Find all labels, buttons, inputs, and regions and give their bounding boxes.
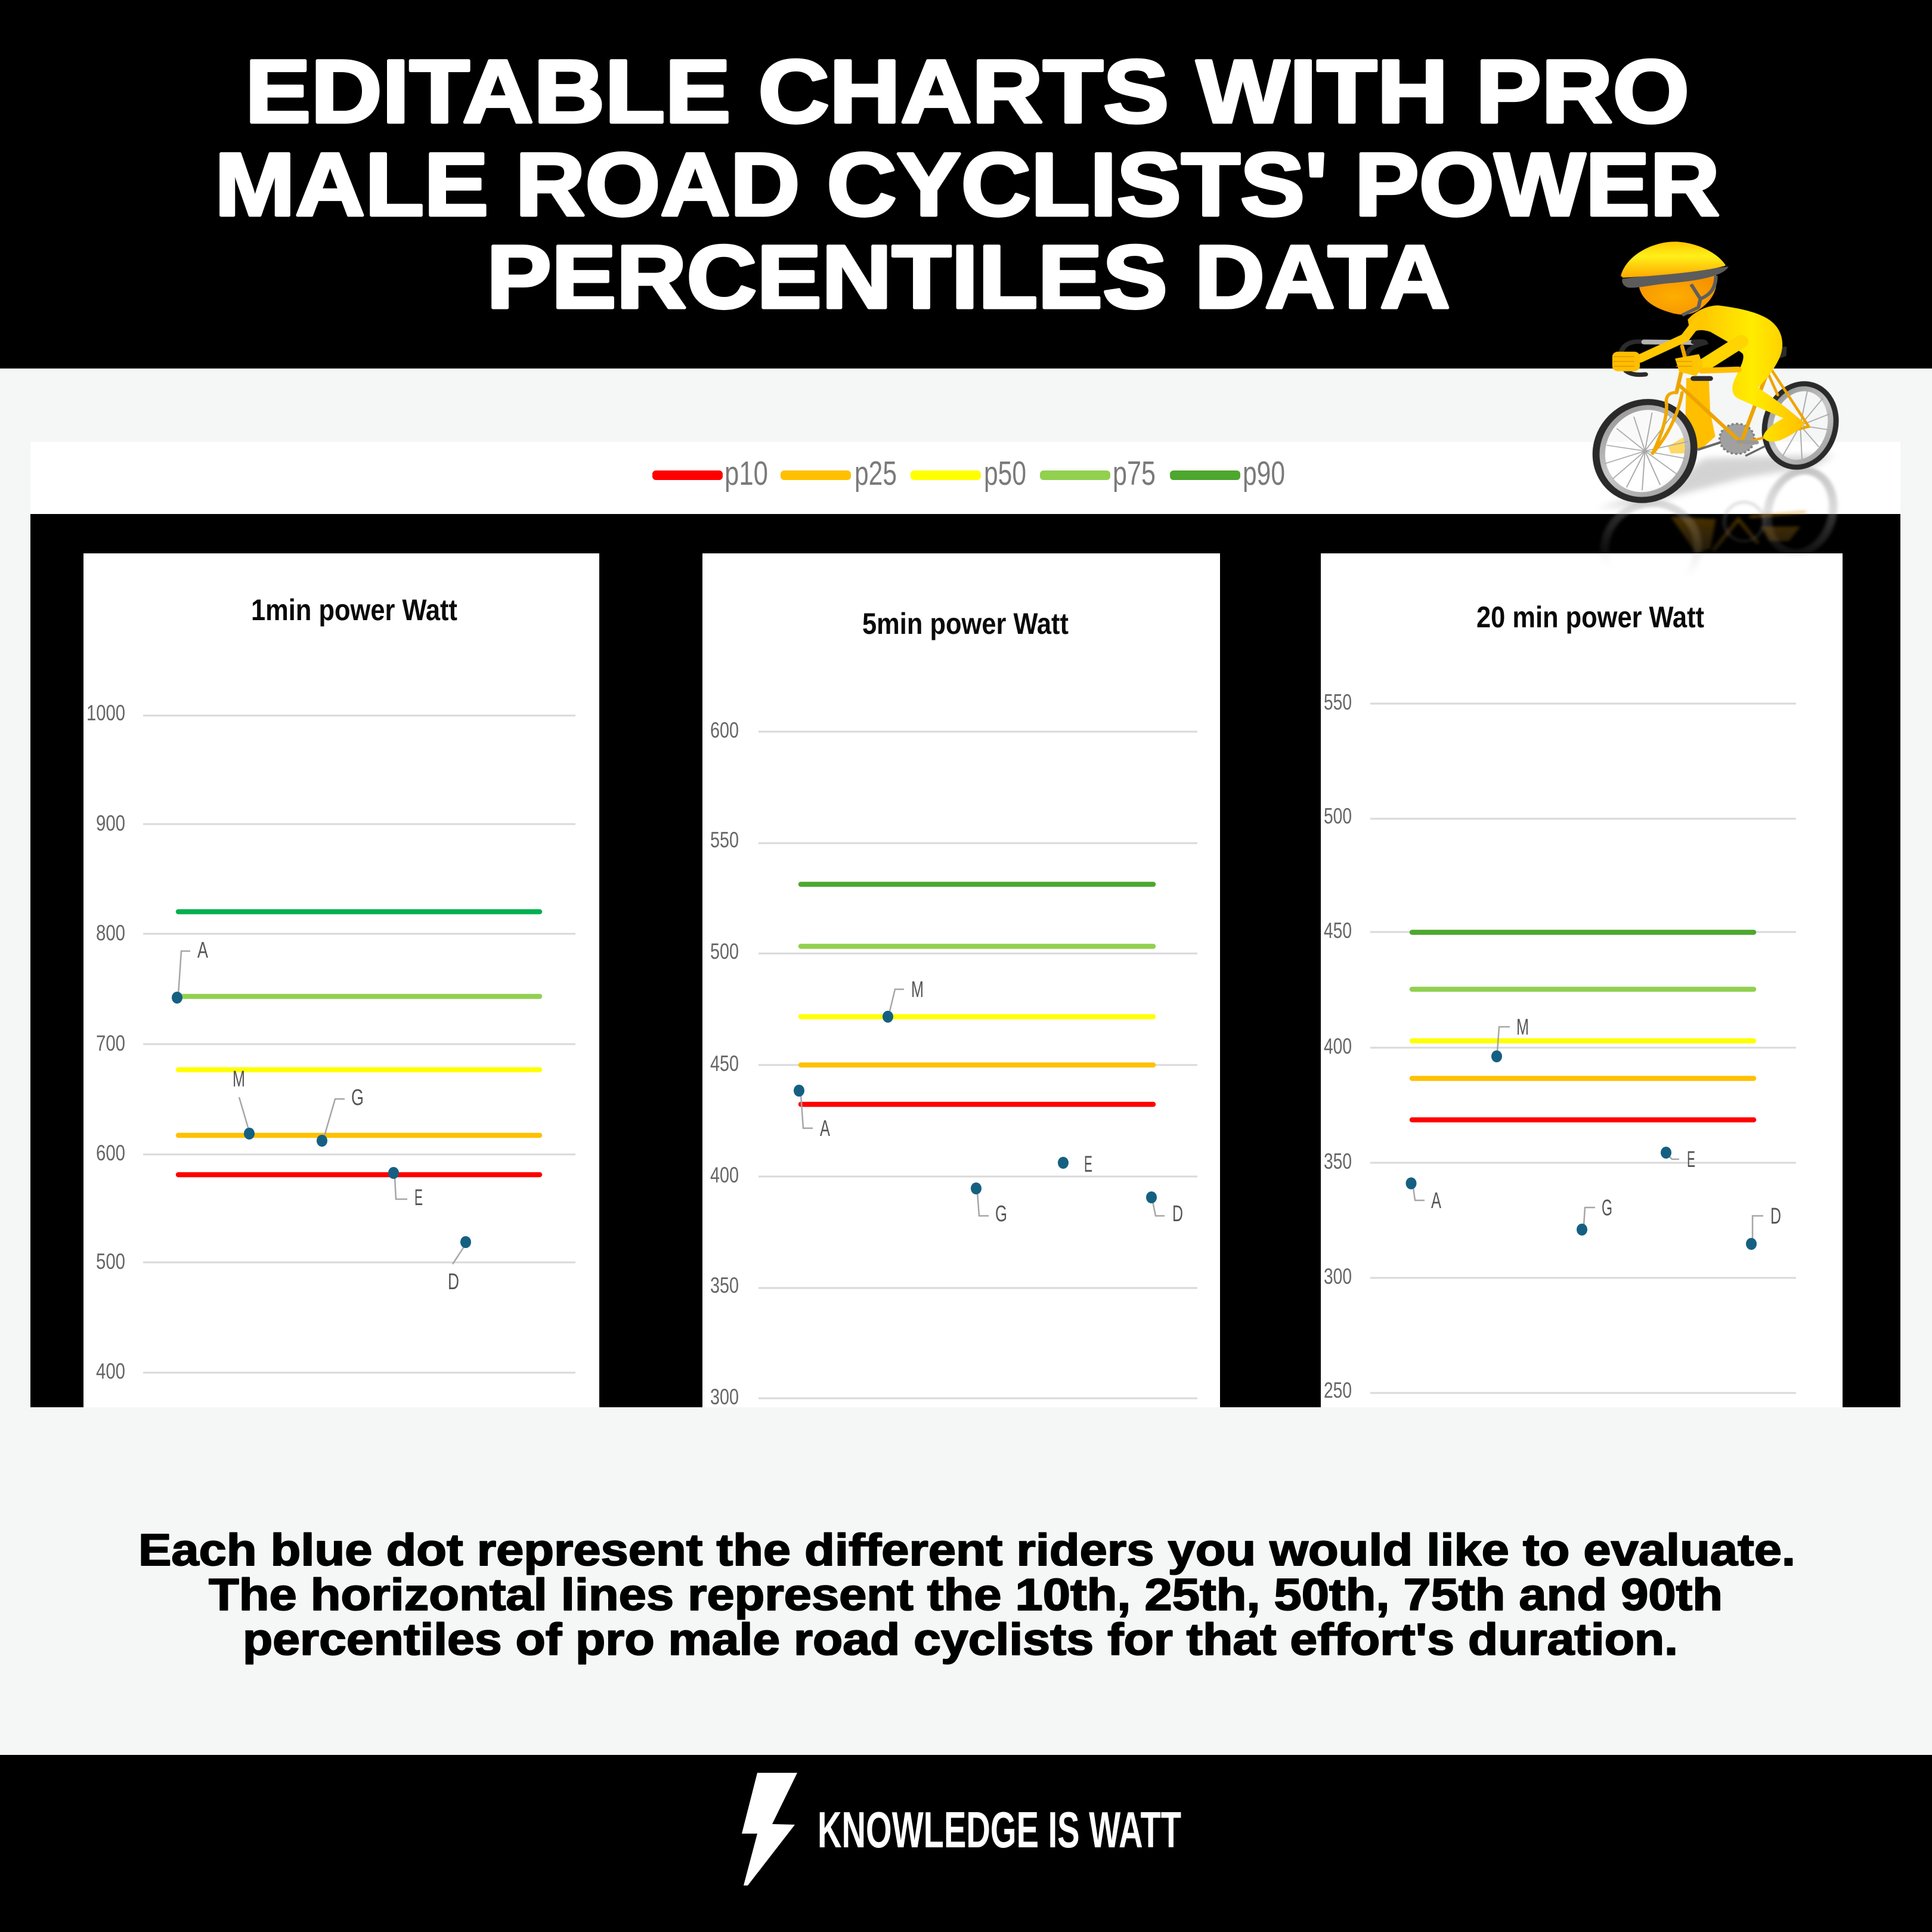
icon: yellow cyclist on bicycle: [1586, 242, 1843, 599]
axis and gridlines: 20 min: 350: [1324, 1149, 1352, 1174]
rider dots: 1min: M: [233, 1067, 245, 1092]
description text: The horizontal lines represent the 10th, 25th, 50th, 75th and 90th: [209, 1569, 1723, 1620]
axis and gridlines: 1min: [86, 701, 575, 1383]
chart title: 20 min: 20 min power Watt: [1476, 600, 1704, 634]
axis and gridlines: 20 min: 400: [1324, 1034, 1352, 1058]
axis and gridlines: 20 min: 300: [1324, 1264, 1352, 1289]
panel: 5min power chart: [702, 553, 1220, 1409]
axis and gridlines: 5min: [710, 718, 1197, 1409]
legend: p50: [984, 454, 1026, 493]
rider dots: 5min: D: [1172, 1202, 1183, 1227]
rider body: [1688, 305, 1804, 442]
rider head: [1639, 274, 1717, 315]
rear wheel: [1757, 379, 1843, 472]
rider dots: 20 min: M: [1516, 1015, 1529, 1040]
rider hands: [1612, 352, 1703, 376]
axis and gridlines: 1min: 900: [96, 811, 125, 835]
title: MALE ROAD CYCLISTS' POWER: [215, 134, 1720, 234]
panel: chart area backdrop: [30, 514, 1900, 1407]
axis and gridlines: 5min: 550: [710, 828, 739, 852]
description text: percentiles of pro male road cyclists for that effort's duration.: [243, 1614, 1678, 1664]
axis and gridlines: 1min: 600: [96, 1141, 125, 1165]
axis and gridlines: 1min: 400: [96, 1359, 125, 1383]
chart title: 1min: 1min power Watt: [251, 593, 457, 627]
helmet: [1621, 242, 1729, 288]
brand name: KNOWLEDGE IS WATT: [818, 1802, 1181, 1859]
rider dots: 20 min: [1406, 1015, 1781, 1250]
axis and gridlines: 5min: 600: [710, 718, 739, 742]
description text: Each blue dot represent the different riders you would like to evaluate.: [138, 1525, 1795, 1575]
bike frame: [1676, 356, 1809, 442]
axis and gridlines: 1min: 800: [96, 921, 125, 945]
legend: p25: [854, 454, 897, 493]
axis and gridlines: 20 min: 500: [1324, 804, 1352, 828]
axis and gridlines: 5min: 350: [710, 1273, 739, 1298]
legend: p10: [724, 454, 768, 493]
chainring: [1698, 424, 1765, 456]
handlebar: [1621, 342, 1710, 379]
axis and gridlines: 5min: 500: [710, 939, 739, 964]
bicycle reflection: [1598, 466, 1840, 599]
rider arms: [1640, 320, 1741, 371]
header band: [0, 0, 1932, 369]
percentile lines: 20 min: [1412, 933, 1754, 1120]
footer band: [0, 1755, 1932, 1932]
far leg: [1668, 378, 1716, 453]
legend: [30, 442, 1900, 514]
axis and gridlines: 1min: 700: [96, 1031, 125, 1055]
front fork: [1652, 392, 1682, 453]
title: PERCENTILES DATA: [487, 227, 1450, 327]
title: EDITABLE CHARTS WITH PRO: [245, 41, 1689, 141]
rider dots: 1min: D: [448, 1270, 459, 1295]
front wheel: [1586, 394, 1704, 508]
axis and gridlines: 1min: 500: [96, 1249, 125, 1274]
panel: 20 min power chart: [1321, 553, 1843, 1407]
rider dots: 5min: M: [911, 977, 924, 1002]
rider dots: 1min: [172, 938, 471, 1295]
icon: lightning bolt logo: [742, 1773, 797, 1885]
rider dots: 5min: G: [995, 1202, 1007, 1227]
axis and gridlines: 20 min: 550: [1324, 690, 1352, 714]
legend: p75: [1113, 454, 1156, 493]
rider dots: 20 min: A: [1431, 1188, 1441, 1213]
rider dots: 1min: A: [197, 938, 208, 963]
axis and gridlines: 5min: 400: [710, 1163, 739, 1187]
rider dots: 20 min: E: [1687, 1147, 1695, 1172]
legend: p90: [1243, 454, 1285, 493]
ground shadow: [1597, 454, 1834, 508]
axis and gridlines: 20 min: [1324, 690, 1796, 1402]
saddle: [1768, 346, 1787, 359]
axis and gridlines: 20 min: 450: [1324, 918, 1352, 943]
panel: 1min power chart: [83, 553, 599, 1407]
rider dots: 5min: E: [1084, 1152, 1092, 1177]
rider dots: 1min: G: [351, 1085, 364, 1110]
title: [215, 41, 1720, 327]
rider dots: 20 min: D: [1770, 1204, 1781, 1229]
rider dots: 5min: [794, 977, 1183, 1227]
description text: [138, 1525, 1795, 1664]
axis and gridlines: 5min: 300: [710, 1385, 739, 1409]
axis and gridlines: 5min: 450: [710, 1051, 739, 1076]
chart title: 5min: 5min power Watt: [862, 607, 1069, 640]
percentile lines: 1min: [178, 912, 540, 1175]
rider dots: 20 min: G: [1602, 1196, 1612, 1221]
rider dots: 5min: A: [820, 1116, 830, 1141]
axis and gridlines: 1min: 1000: [86, 701, 125, 725]
rider dots: 1min: E: [414, 1185, 423, 1210]
axis and gridlines: 20 min: 250: [1324, 1378, 1352, 1402]
percentile lines: 5min: [801, 884, 1153, 1104]
